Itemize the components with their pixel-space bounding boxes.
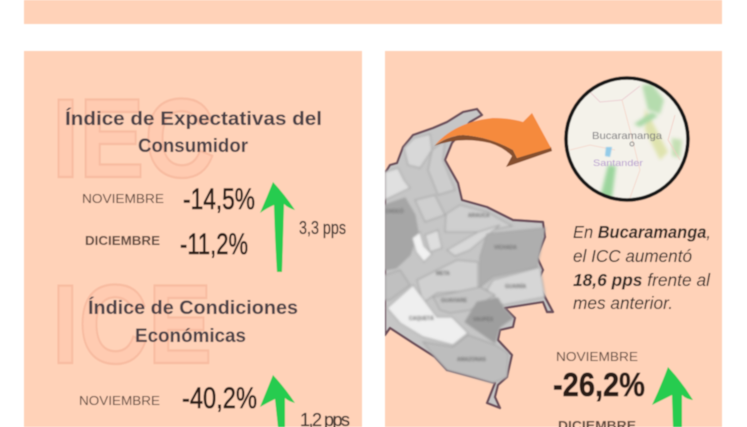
label: 3,3 pps: 3,3 pps — [299, 218, 346, 238]
icon: green up arrow ICE — [260, 375, 295, 427]
text block: Bucaramanga note — [573, 222, 711, 313]
ICE November row — [79, 382, 257, 415]
region names on the map: ARAUCA — [468, 213, 490, 219]
top banner — [24, 0, 722, 24]
icon: green up arrow IEC — [260, 182, 295, 272]
Bucaramanga November label: NOVIEMBRE — [556, 349, 638, 364]
IEC November row: -14,5% — [183, 183, 255, 216]
heading: Índice de Expectativas del Consumidor: Consumidor — [138, 136, 249, 157]
region names on the map: VAUPÉS — [473, 315, 494, 323]
region names on the map: GUAVIARE — [441, 298, 468, 304]
region names on the map: VICHADA — [494, 245, 517, 251]
region names on the map: AMAZONAS — [457, 357, 487, 363]
arrow: orange pointing to Bucaramanga — [434, 113, 552, 167]
text block: Bucaramanga note: 18,6 pps frente al — [573, 270, 711, 290]
heading: Índice de Expectativas del Consumidor: Índice de Expectativas del — [65, 108, 322, 130]
text block: Bucaramanga note: mes anterior. — [573, 293, 673, 313]
region names on the map: GUAINÍA — [505, 282, 526, 290]
text block: Bucaramanga note: el ICC aumentó — [573, 246, 692, 266]
map inset: Bucaramanga circle: Bucaramanga — [592, 130, 662, 142]
IEC December row: -11,2% — [180, 228, 248, 261]
icon: green up arrow Bucaramanga — [652, 367, 693, 427]
IEC November row: NOVIEMBRE — [82, 191, 164, 206]
IEC December row: DICIEMBRE — [85, 233, 160, 248]
ICE November row: -40,2% — [182, 382, 257, 415]
text block: Bucaramanga note: En Bucaramanga, — [573, 222, 711, 242]
heading: Índice de Expectativas del Consumidor — [65, 108, 322, 157]
watermark: IEC: IEC — [52, 76, 215, 201]
map inset: Bucaramanga circle: Santander — [593, 158, 643, 169]
IEC November row — [82, 183, 255, 216]
map of Colombia — [385, 109, 553, 408]
region names on the map: CHOCÓ — [385, 207, 404, 215]
ICE November row: NOVIEMBRE — [79, 393, 160, 408]
Bucaramanga November value: -26,2% — [553, 366, 645, 403]
watermark: ICE: ICE — [52, 262, 212, 387]
region names on the map — [385, 207, 526, 363]
panel: Bucaramanga — [385, 51, 722, 427]
heading: Índice de Condiciones Económicas — [88, 297, 298, 347]
region names on the map: META — [436, 271, 450, 277]
map inset: Bucaramanga circle — [566, 78, 688, 200]
panel: national indices — [24, 51, 362, 427]
heading: Índice de Condiciones Económicas: Índice de Condiciones — [88, 297, 298, 319]
heading: Índice de Condiciones Económicas: Económicas — [135, 326, 246, 347]
IEC December row — [85, 228, 248, 261]
region names on the map: CAQUETÁ — [409, 315, 434, 322]
